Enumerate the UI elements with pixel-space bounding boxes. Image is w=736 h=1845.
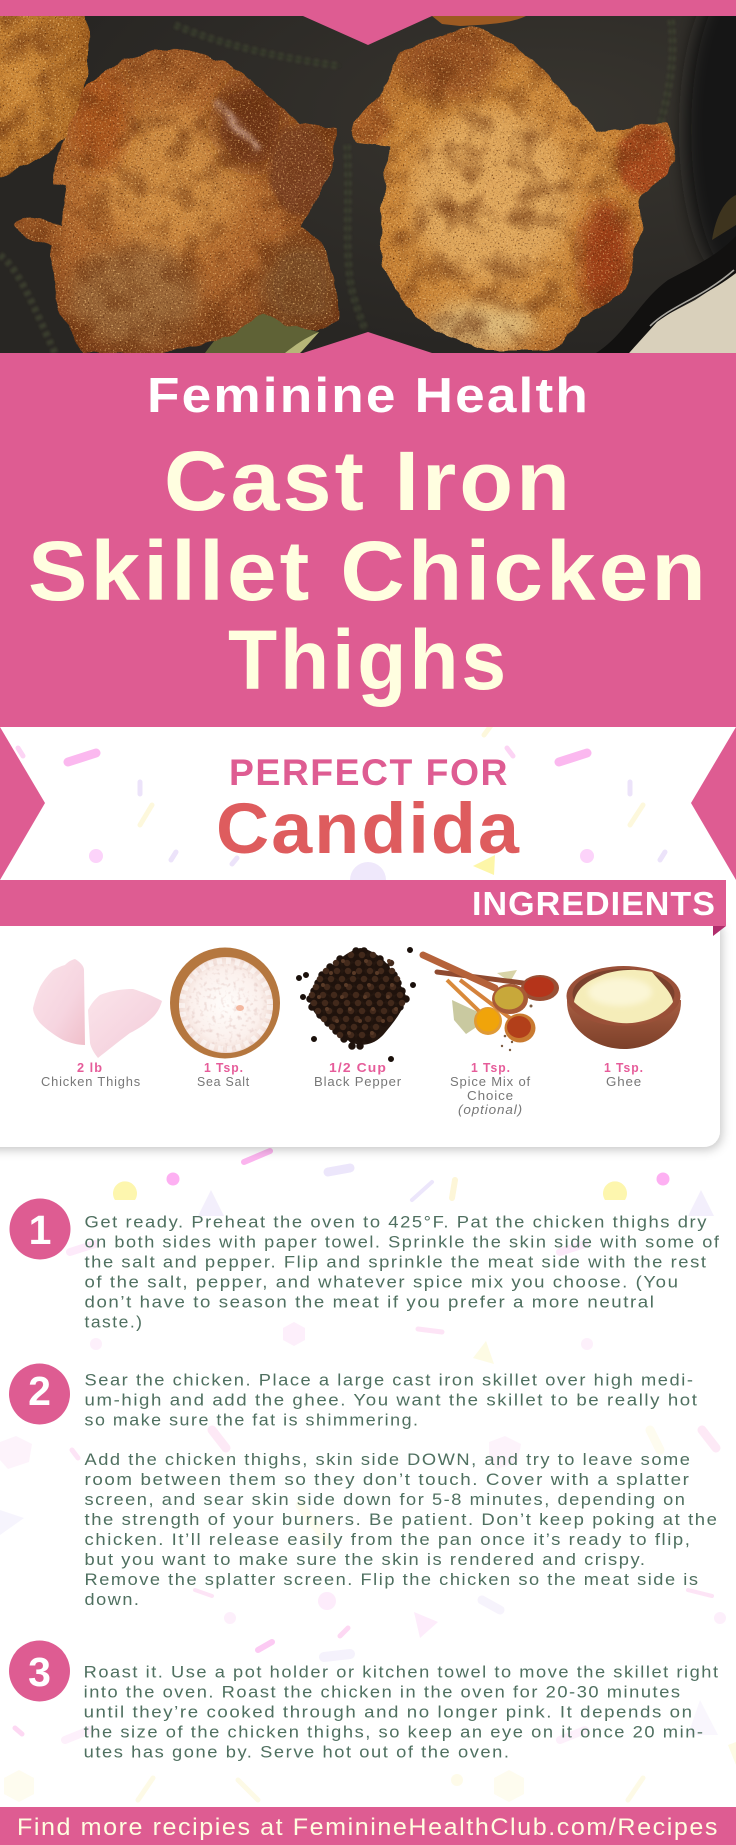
name line two: Choice <box>467 1089 514 1103</box>
icon: raw chicken thighs <box>33 959 162 1058</box>
footer link text: Find more recipies at FeminineHealthClub.com/Recipes <box>17 1814 719 1841</box>
name: Chicken Thighs <box>41 1075 141 1089</box>
title: Feminine Health: Feminine Health <box>147 369 590 423</box>
step 3 text: utes has gone by. Serve hot out of the oven. <box>84 1744 511 1762</box>
number badge 1 <box>10 1198 70 1260</box>
number badge 2: 2 <box>28 1368 51 1414</box>
quantity: 1 Tsp. <box>471 1061 511 1075</box>
quantity: 1/2 Cup <box>329 1061 387 1075</box>
text: perfect for: PERFECT FOR <box>229 752 509 793</box>
title: Skillet Chicken: Skillet Chicken <box>28 524 709 618</box>
small chicken piece at top <box>432 16 526 26</box>
number badge 1: 1 <box>29 1207 51 1253</box>
ribbon right tail <box>691 727 736 880</box>
ribbon: perfect for candida <box>0 727 736 880</box>
icon: pile of peppercorns <box>299 948 414 1059</box>
ingredient: sea salt <box>170 948 280 1089</box>
step 3 text: Roast it. Use a pot holder or kitchen towel to move the skillet right <box>84 1664 720 1682</box>
note: optional: (optional) <box>458 1103 523 1117</box>
skillet rim <box>596 252 736 353</box>
step 3 text <box>84 1664 720 1762</box>
title: Cast Iron: Cast Iron <box>164 434 573 528</box>
number badge 2 <box>9 1364 70 1424</box>
step 2 text: Add the chicken thighs, skin side DOWN, and try to leave some <box>84 1451 692 1469</box>
icon: wooden bowl of salt <box>170 948 280 1058</box>
number badge 3: 3 <box>28 1649 51 1695</box>
ingredient: black pepper <box>299 948 414 1089</box>
footer band <box>0 1807 736 1845</box>
step 3 text: until they’re cooked through and no longer pink. It depends on <box>84 1704 694 1722</box>
step 2 text: chicken. It’ll release easily from the pan once it’s ready to flip, <box>84 1531 692 1549</box>
top pink band with notch <box>0 0 736 45</box>
quantity: 1 Tsp. <box>604 1061 644 1075</box>
step 2 text: the strength of your burners. Be patient. Don’t keep poking at the <box>84 1511 718 1529</box>
step 2 text: but you want to make sure the skin is rendered and crispy. <box>84 1551 646 1569</box>
number badge 3 <box>9 1640 70 1702</box>
ingredient: ghee <box>566 966 681 1089</box>
name: Ghee <box>606 1075 642 1089</box>
name: Spice Mix of <box>450 1075 531 1089</box>
step 1 text: on both sides with paper towel. Sprinkle the skin side with some of <box>84 1234 720 1252</box>
heading: ingredients: INGREDIENTS <box>472 885 716 922</box>
name: Sea Salt <box>197 1075 250 1089</box>
step 3 text: into the oven. Roast the chicken in the oven for 20-30 minutes <box>84 1684 682 1702</box>
step 1 text: the salt and pepper. Flip and sprinkle the meat side with the rest <box>84 1254 708 1272</box>
title panel <box>0 332 736 727</box>
text: candida: Candida <box>216 790 521 869</box>
step 1 text: taste.) <box>84 1314 144 1332</box>
icon: wooden spoons with spices <box>423 955 559 1051</box>
step 2 text <box>84 1372 718 1609</box>
quantity: 2 lb <box>77 1061 103 1075</box>
ingredients card <box>0 915 720 1147</box>
step 1 <box>10 1198 720 1332</box>
name: Black Pepper <box>314 1075 402 1089</box>
step 2 text: room between them so they don’t touch. Cover with a splatter <box>84 1471 690 1489</box>
icon: clay bowl of ghee <box>566 966 681 1049</box>
banner fold <box>713 926 726 936</box>
step 1 text <box>84 1214 720 1332</box>
step 2 text: down. <box>84 1591 140 1609</box>
step 2 text: so make sure the fat is shimmering. <box>84 1412 420 1430</box>
step 1 text: of the salt, pepper, and whatever spice mix you choose. (You <box>84 1274 680 1292</box>
step 1 text: Get ready. Preheat the oven to 425°F. Pat the chicken thighs dry <box>84 1214 708 1232</box>
upper-left chicken thigh <box>0 10 88 182</box>
left chicken thigh <box>14 48 340 353</box>
lemon slice <box>205 314 319 353</box>
step 2 text: um-high and add the ghee. You want the skillet to be really hot <box>84 1392 698 1410</box>
right chicken thigh <box>352 26 676 352</box>
ribbon left tail <box>0 727 45 880</box>
title: Thighs: Thighs <box>228 613 509 707</box>
step 2 text: screen, and sear skin side down for 5-8 minutes, depending on <box>84 1491 686 1509</box>
step 2 text: Remove the splatter screen. Flip the chicken so the meat side is <box>84 1571 700 1589</box>
step 3 text: the size of the chicken thighs, so keep an eye on it once 20 min- <box>84 1724 705 1742</box>
step 2 text: Sear the chicken. Place a large cast iron skillet over high medi- <box>84 1372 694 1390</box>
step 1 text: don’t have to season the meat if you prefer a more neutral <box>84 1294 656 1312</box>
step 2 <box>9 1364 718 1609</box>
step 3 <box>9 1640 720 1762</box>
quantity: 1 Tsp. <box>204 1061 244 1075</box>
confetti background <box>0 720 736 1807</box>
thyme sprigs <box>0 20 673 353</box>
background linen <box>629 273 736 353</box>
ingredient: spice mix <box>423 955 559 1117</box>
hero photo: chicken thighs in a cast iron skillet <box>0 0 736 360</box>
ingredient: chicken thighs <box>33 959 162 1089</box>
ingredients banner <box>0 880 726 936</box>
